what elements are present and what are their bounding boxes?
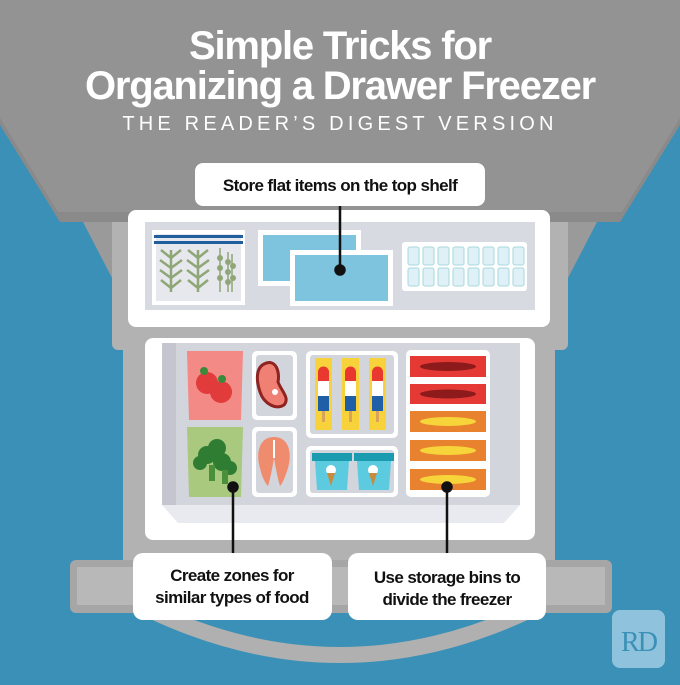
logo: RD	[612, 610, 665, 668]
ice tray	[402, 242, 527, 291]
fridge body	[83, 215, 597, 565]
herb bag	[152, 230, 245, 305]
ice cream tubs	[306, 446, 398, 497]
callout: zones: Create zones for	[170, 566, 295, 585]
subtitle: THE READER’S DIGEST VERSION	[122, 113, 558, 135]
connector lines	[228, 205, 452, 555]
blue flat trays	[258, 230, 393, 306]
logo: RD: RD	[621, 627, 658, 658]
lower drawer	[145, 338, 535, 540]
callout: bins: Use storage bins to	[374, 568, 520, 587]
top shelf	[128, 210, 550, 327]
callout: top shelf	[195, 163, 485, 206]
callout: bins: divide the freezer	[382, 590, 512, 609]
top header trapezoid	[0, 0, 680, 222]
salmon	[252, 427, 297, 497]
popsicles	[306, 351, 398, 438]
callout: zones: similar types of food	[155, 588, 309, 607]
strawberry bin	[187, 351, 243, 420]
callout: top shelf: Store flat items on the top shelf	[223, 176, 458, 195]
broccoli bin	[187, 427, 243, 497]
callout: bins	[348, 553, 546, 620]
callout: zones	[133, 553, 332, 620]
handle	[70, 560, 612, 655]
title	[85, 24, 596, 108]
title: Simple Tricks for	[189, 24, 492, 68]
meat	[252, 351, 297, 420]
storage bins	[406, 350, 490, 497]
title: Organizing a Drawer Freezer	[85, 64, 596, 108]
